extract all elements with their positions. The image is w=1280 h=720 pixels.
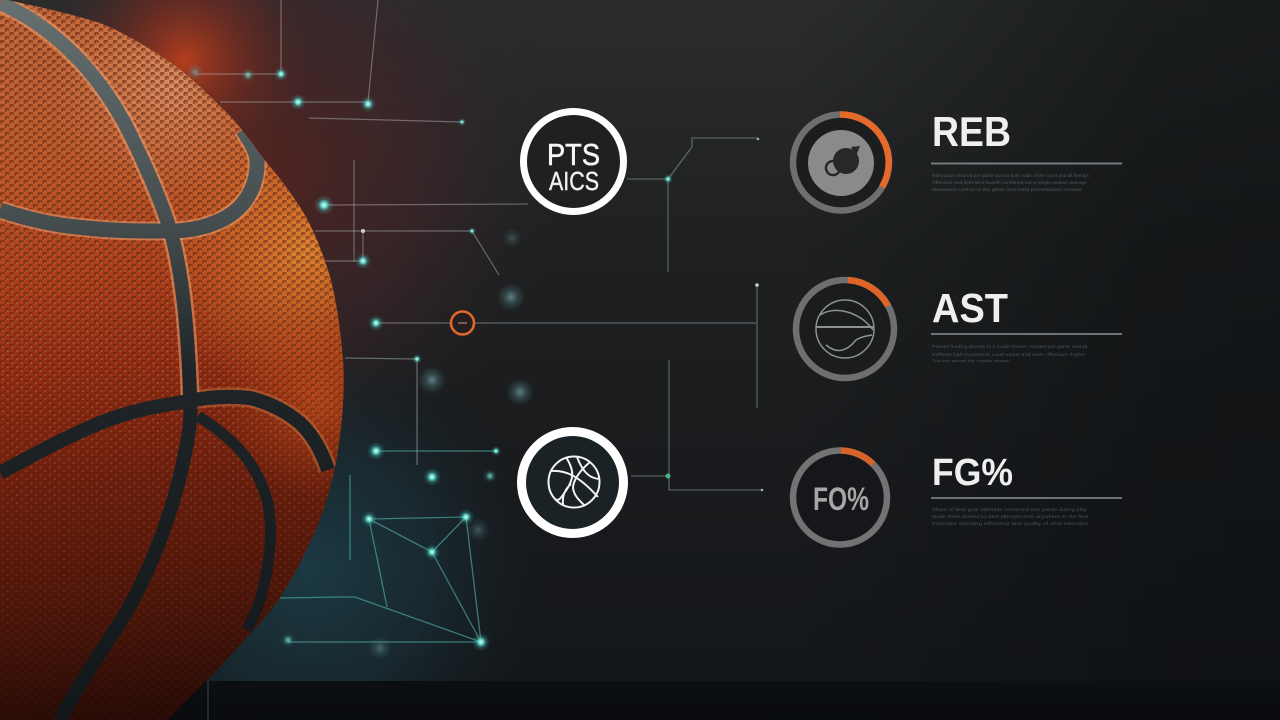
- text block: FG%: FG%: [932, 452, 1013, 494]
- text block: AST: Passes leading directly to a made basket counted per game overall: [932, 344, 1087, 349]
- stat ring: AST: [796, 280, 894, 378]
- text block: FG%: Made shots divided by total attempts from anywhere on the floor: [932, 514, 1090, 519]
- REB icon glyph: [826, 146, 860, 175]
- ball seam highlights: [0, 3, 328, 470]
- AST ball icon: [816, 300, 874, 358]
- text block: FG%: Indicates shooting efficiency and quality of shot selection: [932, 521, 1089, 526]
- text block: FG%: Share of field goal attempts converted into points during play: [932, 507, 1088, 512]
- basketball: [0, 0, 360, 720]
- stat icon: PTS badge: PTS: [547, 137, 600, 172]
- orange marker ring: [451, 312, 474, 334]
- text block: REB: Rebounds secured per game across both ends of the court and all lineups: [932, 173, 1090, 178]
- stat icon: PTS badge: AICS: [549, 166, 599, 196]
- stat ring: FG: FO%: [813, 481, 869, 517]
- text block: AST: Reflects ball movement, court vision and team offensive rhythm: [932, 352, 1086, 357]
- text block: AST: Tracked across the regular season: [932, 359, 1010, 363]
- text block: REB: Offensive and defensive boards combined into a single season average: [932, 180, 1088, 185]
- network: lower teal connector lines and nodes: [280, 354, 501, 660]
- ball seams: [0, 3, 328, 720]
- stat ring: REB: [793, 114, 889, 210]
- text block: AST: AST: [932, 285, 1008, 331]
- network: connectors to stat icons: [627, 138, 763, 491]
- network: upper connector lines and nodes: [187, 0, 756, 406]
- text block: FG%: [931, 452, 1122, 526]
- text block: AST: [931, 285, 1122, 363]
- stat icon: basketball badge: [522, 432, 624, 534]
- text block: REB: REB: [932, 108, 1011, 155]
- stat ring: FG: [793, 450, 887, 544]
- text block: REB: Measures control of the glass and extra possessions created: [932, 187, 1083, 192]
- text block: REB: [931, 108, 1122, 192]
- stat icon: PTS badge: [524, 112, 624, 212]
